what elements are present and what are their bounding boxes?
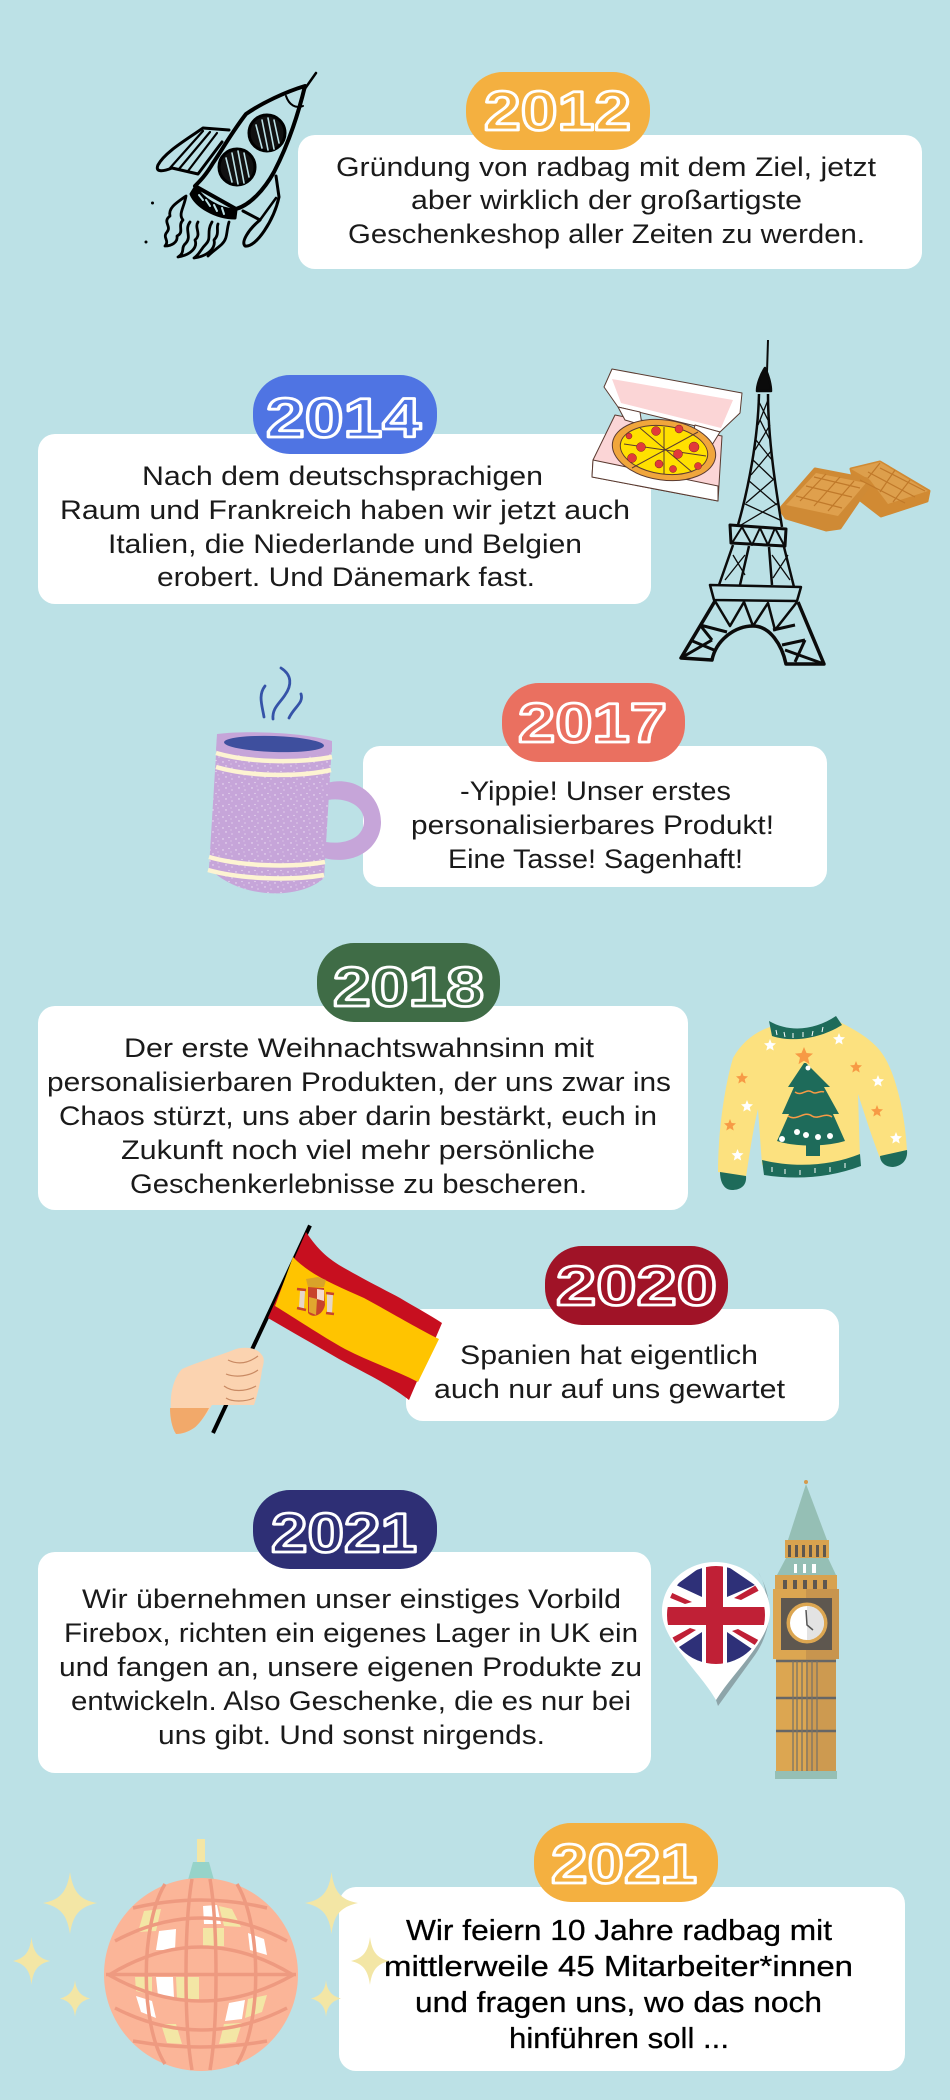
text: 2014: erobert. Und Dänemark fast. (157, 562, 535, 592)
panel: 2012 founding (298, 72, 922, 269)
year badge 2018: 2018 (333, 955, 484, 1018)
year badge 2014: 2014 (266, 386, 421, 449)
text: 2014: Nach dem deutschsprachigen (142, 461, 543, 491)
text: 2014 (60, 461, 630, 592)
text: 2018 (47, 1033, 671, 1199)
text: 2021 UK: entwickeln. Also Geschenke, die es nur bei (71, 1686, 631, 1716)
icon: pizza box (592, 369, 742, 501)
text: 2021 anniversary: hinführen soll ... (509, 2023, 729, 2055)
icon: UK map pin (662, 1562, 770, 1706)
year badge 2018 (317, 943, 500, 1022)
text: 2020: Spanien hat eigentlich (460, 1340, 758, 1370)
year badge 2017: 2017 (518, 691, 667, 754)
text: 2017: Eine Tasse! Sagenhaft! (448, 844, 743, 874)
icon: Big Ben tower (773, 1480, 839, 1779)
text: 2014: Italien, die Niederlande und Belgien (108, 529, 582, 559)
text: 2018: Zukunft noch viel mehr persönliche (121, 1135, 595, 1165)
text: 2021 UK: Wir übernehmen unser einstiges Vorbild (82, 1584, 621, 1614)
panel: 2014 expansion (38, 375, 651, 604)
text: 2021 anniversary: und fragen uns, wo das noch (415, 1987, 822, 2019)
text: 2017: personalisierbares Produkt! (411, 810, 774, 840)
year badge 2012 (466, 72, 650, 150)
icon: hand holding Spanish flag (170, 1226, 442, 1434)
panel: 2018 christmas (38, 943, 688, 1210)
year badge 2017 (502, 683, 685, 762)
icon: mug with steam (208, 668, 381, 893)
text: 2017: -Yippie! Unser erstes (460, 776, 731, 806)
text: 2021 anniversary (384, 1915, 853, 2055)
text: 2021 UK (59, 1584, 642, 1750)
text: 2017 (411, 776, 774, 874)
text: 2018: Chaos stürzt, uns aber darin bestärkt, euch in (59, 1101, 657, 1131)
year badge 2021 UK: 2021 (271, 1501, 417, 1564)
text: 2012: Gründung von radbag mit dem Ziel, jetzt (336, 152, 877, 182)
year badge 2012: 2012 (484, 79, 631, 142)
sparkle cluster (13, 1872, 389, 2017)
panel: 2021 UK (38, 1490, 651, 1773)
text: 2021 UK: Firebox, richten ein eigenes Lager in UK ein (64, 1618, 638, 1648)
icon: Eiffel tower (681, 340, 824, 664)
icon: christmas sweater (718, 1016, 907, 1190)
year badge 2021 anniversary (534, 1823, 718, 1902)
icon: rocket (144, 73, 316, 258)
text: 2012: Geschenkeshop aller Zeiten zu werden. (348, 219, 865, 249)
year badge 2014 (253, 375, 437, 454)
text: 2021 UK: uns gibt. Und sonst nirgends. (158, 1720, 545, 1750)
year badge 2020: 2020 (556, 1254, 717, 1317)
panel: 2017 mug (363, 683, 827, 887)
text: 2021 UK: und fangen an, unsere eigenen Produkte zu (59, 1652, 642, 1682)
panel: 2021 anniversary (339, 1823, 905, 2071)
text: 2018: personalisierbaren Produkten, der uns zwar ins (47, 1067, 671, 1097)
text: 2018: Geschenkerlebnisse zu bescheren. (130, 1169, 587, 1199)
icon: waffles (780, 462, 929, 530)
text: 2020 (434, 1340, 786, 1404)
text: 2018: Der erste Weihnachtswahnsinn mit (124, 1033, 595, 1063)
text: 2012: aber wirklich der großartigste (411, 185, 802, 215)
year badge 2021 anniversary: 2021 (551, 1832, 697, 1895)
year badge 2021 UK (253, 1490, 437, 1569)
text: 2020: auch nur auf uns gewartet (434, 1374, 786, 1404)
year badge 2020 (545, 1246, 728, 1325)
panel: 2020 Spain (406, 1246, 839, 1421)
text: 2021 anniversary: mittlerweile 45 Mitarbeiter*innen (384, 1951, 853, 1983)
text: 2014: Raum und Frankreich haben wir jetzt auch (60, 495, 630, 525)
text: 2012 (336, 152, 877, 249)
text: 2021 anniversary: Wir feiern 10 Jahre radbag mit (406, 1915, 832, 1947)
icon: disco ball with sparkles (13, 1839, 389, 2071)
